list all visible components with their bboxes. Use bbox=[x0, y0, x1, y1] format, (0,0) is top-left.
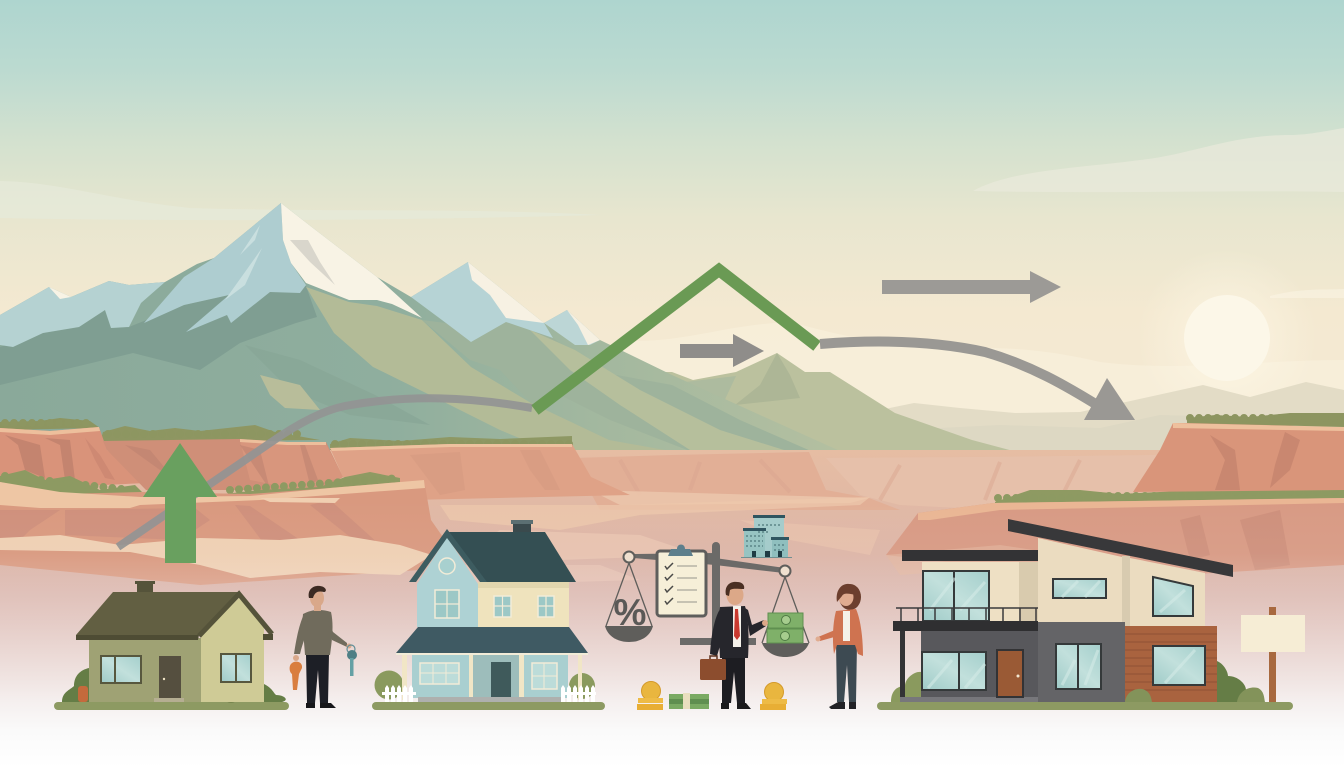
arrow: green up bbox=[143, 443, 217, 563]
trousers bbox=[722, 657, 745, 703]
chimney bbox=[135, 581, 155, 584]
distant hazy mountains bbox=[880, 382, 1344, 470]
hands bbox=[293, 655, 299, 661]
head bbox=[726, 585, 744, 605]
small bush bbox=[1125, 689, 1152, 702]
lower walls bbox=[921, 630, 1038, 698]
white fade at bottom bbox=[0, 500, 1344, 768]
cardigan bbox=[833, 609, 863, 656]
upper walls bbox=[922, 562, 1038, 622]
clouds bbox=[0, 128, 1344, 460]
hand bbox=[762, 620, 768, 626]
pale canyon strata bbox=[440, 497, 880, 585]
main roof bbox=[449, 532, 576, 582]
ground bbox=[54, 702, 289, 710]
roof bbox=[76, 592, 239, 635]
glazed windows bbox=[922, 571, 1205, 690]
arrow: grey flat top bbox=[882, 271, 1061, 303]
trousers bbox=[836, 643, 857, 702]
left pan bbox=[606, 563, 652, 626]
sky background bbox=[0, 0, 1344, 520]
money on pan bbox=[767, 613, 803, 643]
upper walls bbox=[417, 537, 478, 627]
gold coin stack right bbox=[760, 682, 787, 710]
ground bbox=[877, 702, 1293, 710]
cliff: back left bbox=[0, 427, 343, 490]
arms bbox=[710, 608, 726, 656]
second peak snow bbox=[411, 262, 553, 342]
bushes bbox=[891, 672, 921, 702]
jacket bbox=[719, 606, 749, 658]
cliff: front right bbox=[886, 498, 1344, 580]
tree line: back cliffs bbox=[0, 418, 572, 450]
house: small starter home bbox=[54, 581, 289, 710]
cliff: back right bbox=[1133, 413, 1344, 492]
ground bbox=[372, 702, 605, 710]
white snow main bbox=[281, 203, 422, 318]
chimney bbox=[511, 520, 533, 524]
head bbox=[838, 588, 854, 606]
balcony bbox=[893, 621, 1038, 631]
porch roof bbox=[396, 627, 588, 653]
shoes bbox=[306, 703, 336, 708]
sweater bbox=[303, 610, 333, 655]
sun bbox=[1137, 248, 1317, 428]
briefcase bbox=[700, 659, 726, 680]
arm bbox=[818, 612, 843, 641]
porch windows bbox=[420, 663, 459, 684]
arrow: grey small flat bbox=[680, 334, 764, 367]
white fence left bbox=[382, 685, 416, 702]
gold coin stack left bbox=[637, 682, 663, 710]
orange keys bbox=[290, 662, 302, 690]
clipboard bbox=[657, 544, 706, 616]
bushes bbox=[62, 668, 286, 702]
flat roof bbox=[902, 550, 1038, 561]
upper windows bbox=[439, 558, 455, 574]
porch walls bbox=[412, 655, 568, 698]
teal keys bbox=[347, 645, 357, 676]
legs bbox=[306, 654, 329, 703]
door bbox=[997, 650, 1023, 697]
columns bbox=[402, 655, 582, 700]
slanted roof bbox=[1008, 519, 1233, 577]
cliff: front left ledge bbox=[0, 480, 445, 585]
white fence right bbox=[561, 685, 596, 702]
blue-grey snow left range bbox=[0, 281, 165, 347]
arrow: grey rising curve bbox=[118, 398, 532, 547]
mountain base bbox=[0, 203, 860, 460]
person: businessman bbox=[700, 582, 768, 709]
scale post and base bbox=[712, 542, 720, 640]
apartment buildings bbox=[741, 515, 792, 558]
right pan bbox=[762, 577, 809, 643]
balance scale with rate and money bbox=[605, 515, 809, 657]
shoes bbox=[829, 702, 856, 709]
arrow: green peak line bbox=[535, 270, 817, 410]
far canyon walls bbox=[572, 452, 1158, 510]
shoes bbox=[721, 703, 751, 709]
cash bundle bbox=[669, 693, 709, 709]
door bbox=[491, 662, 511, 698]
mountain sunlit olive slope bbox=[306, 287, 720, 460]
arrow: grey falling curve bbox=[820, 342, 1135, 420]
hair back bbox=[839, 584, 861, 610]
person: woman in orange cardigan bbox=[816, 584, 863, 709]
head bbox=[310, 589, 324, 607]
person: man with keys bbox=[290, 586, 357, 708]
mountain shadow side bbox=[0, 286, 317, 385]
percent sign: % bbox=[614, 592, 646, 633]
door bbox=[159, 656, 181, 698]
tree line: mid ledge bbox=[0, 470, 1344, 505]
windows bbox=[101, 656, 141, 683]
bushes bbox=[374, 670, 404, 700]
walls bbox=[89, 638, 201, 702]
canyon floor bbox=[0, 450, 1344, 768]
cliff: middle bbox=[330, 444, 630, 500]
house: modern home with sign bbox=[877, 519, 1305, 710]
scale beam bbox=[634, 553, 785, 573]
mountain: small right foothill bbox=[620, 353, 1032, 470]
mountain: main snow range bbox=[0, 203, 860, 460]
shirt and tie bbox=[733, 606, 741, 647]
house: two-storey family home bbox=[372, 520, 605, 710]
blue-grey snow main bbox=[144, 203, 306, 332]
sign bbox=[1241, 607, 1305, 702]
